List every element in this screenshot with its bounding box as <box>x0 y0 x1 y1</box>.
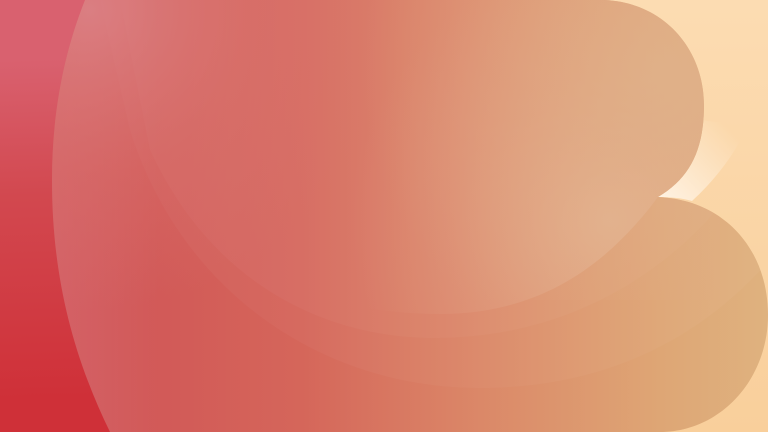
soft light glow inside inner arc <box>460 146 662 306</box>
right background <box>300 0 768 432</box>
left edge sheen <box>52 116 106 422</box>
inner arc band, lowest <box>100 0 768 388</box>
top right warm tint <box>300 0 720 300</box>
left background <box>0 0 300 432</box>
inner arc band, middle <box>120 0 725 338</box>
soft pink glow top left <box>52 0 221 188</box>
bright notch highlight <box>656 105 757 201</box>
